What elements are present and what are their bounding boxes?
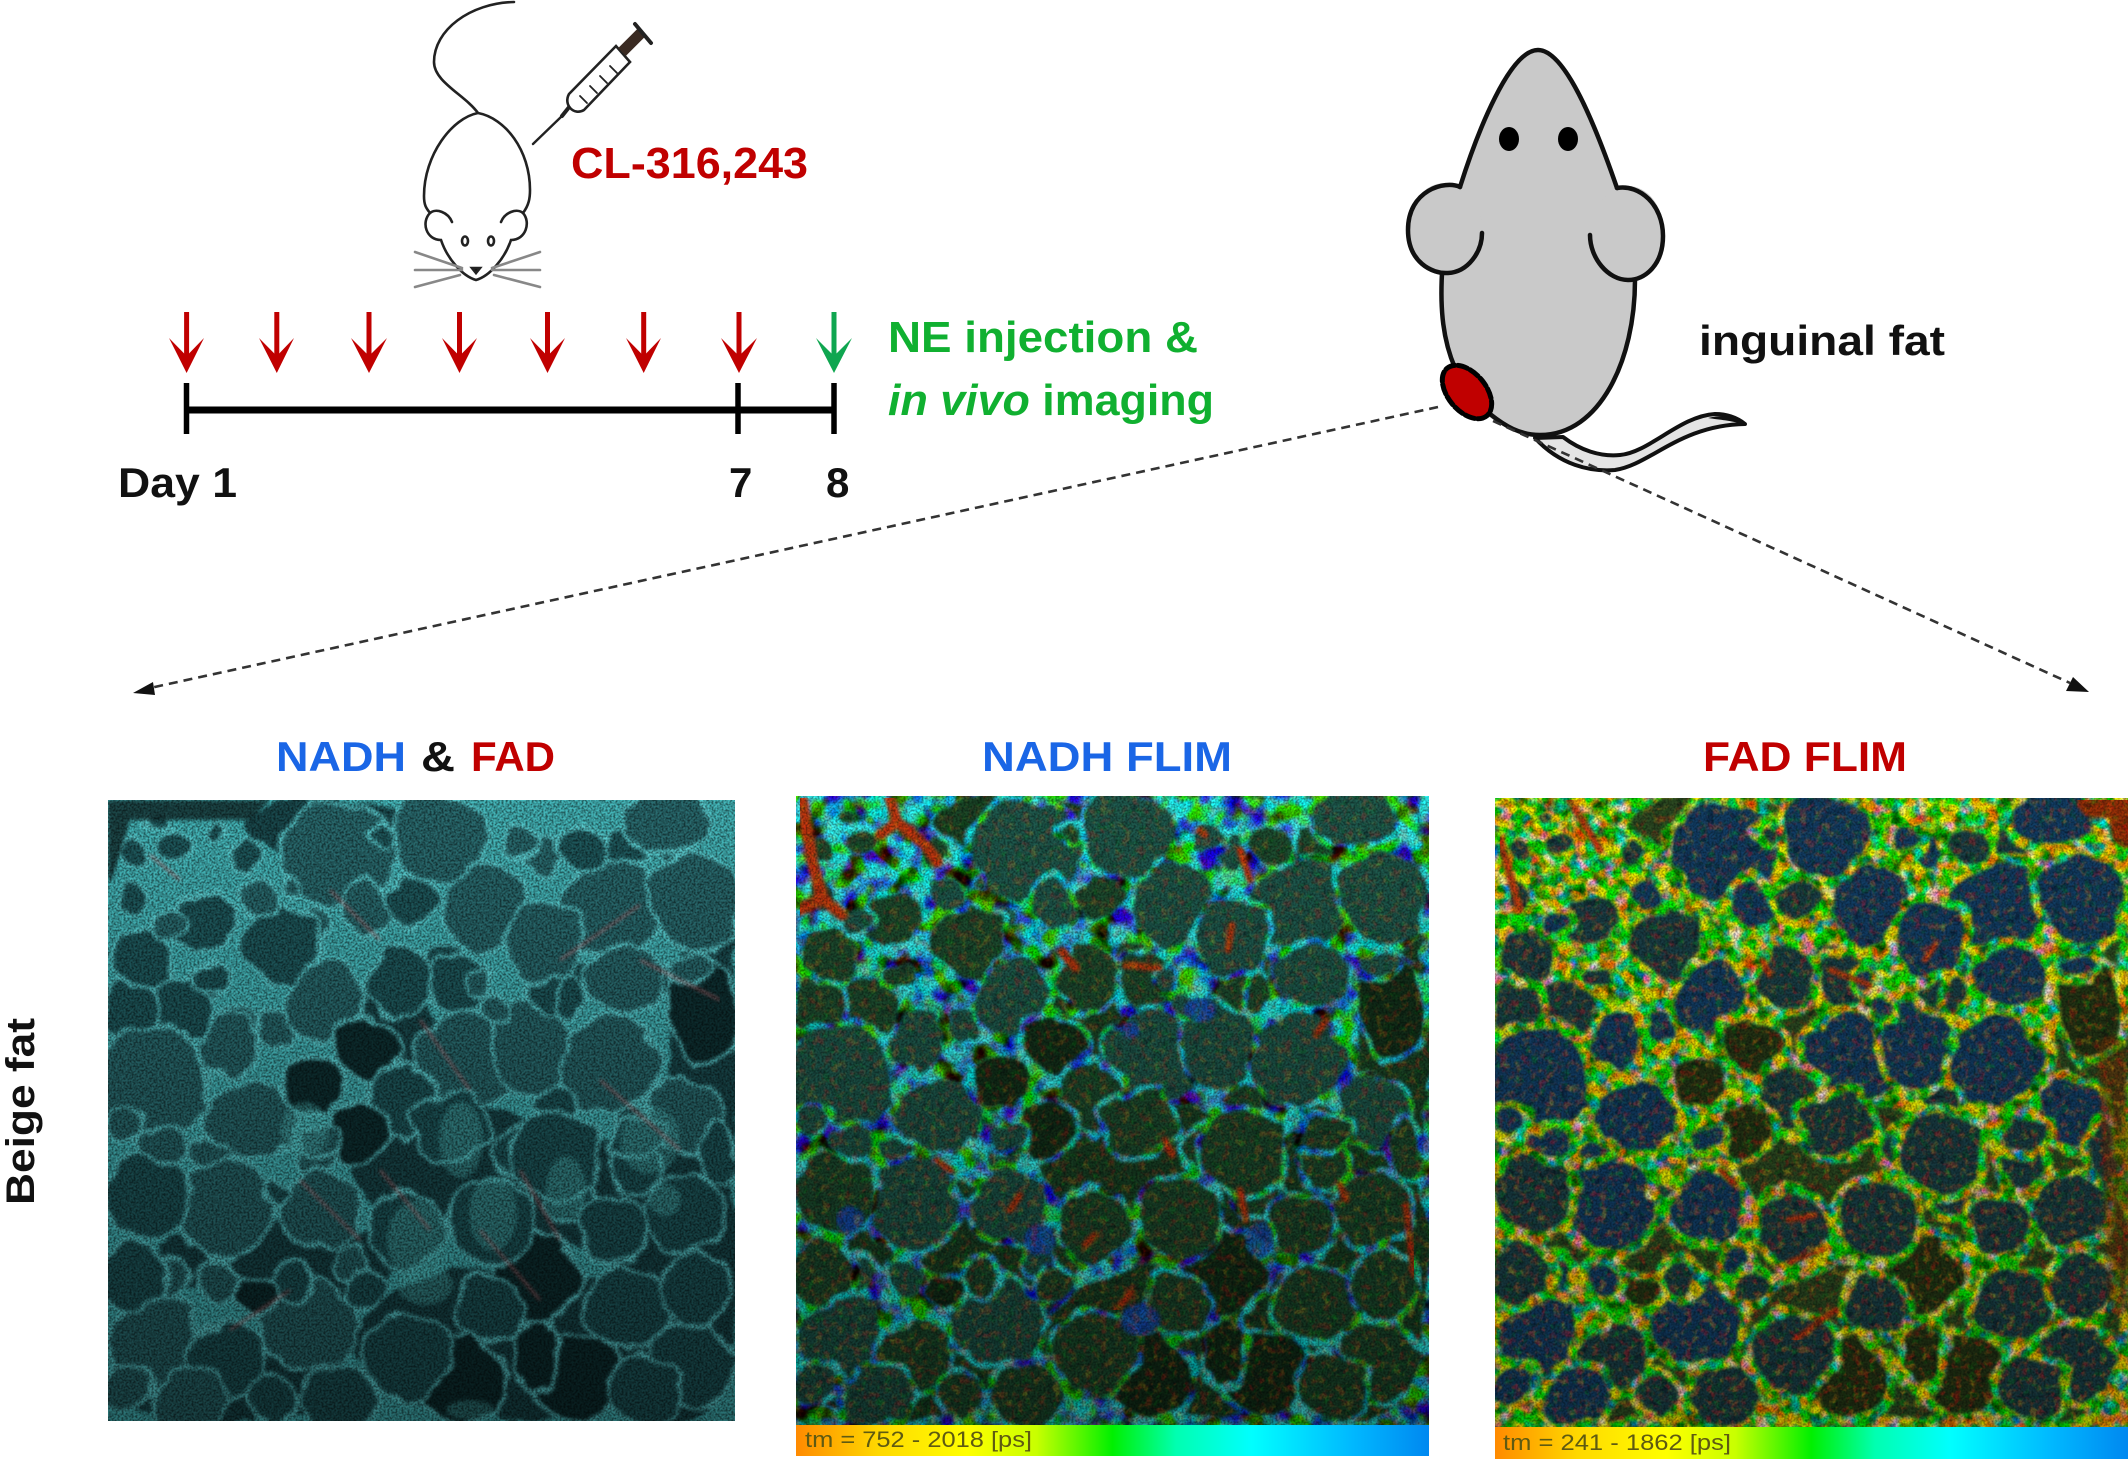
heading: NADH & FAD: & [421, 733, 455, 780]
arrow: dashed left zoom line [133, 407, 1438, 695]
heading: FAD FLIM: FAD FLIM [1703, 733, 1907, 780]
heading: NADH FLIM: NADH FLIM [982, 733, 1232, 780]
heading: NADH & FAD [276, 733, 555, 780]
text: inguinal fat: inguinal fat [1699, 317, 1945, 364]
color bar: NADH lifetime scale: tm = 752 - 2018 [ps] [805, 1427, 1032, 1452]
text: NE injection and in vivo imaging [888, 313, 1214, 425]
panel: NADH FLIM micrograph [782, 787, 1432, 1428]
timeline: injection schedule: 7 [729, 459, 752, 506]
row label: Beige fat: Beige fat [0, 1018, 43, 1205]
icon: line-art mouse with syringe [415, 2, 651, 287]
timeline: injection schedule [118, 312, 852, 506]
arrow: dashed right zoom line [1493, 421, 2089, 692]
text: NE injection and in vivo imaging: NE injection & [888, 313, 1198, 362]
text: NE injection and in vivo imaging: in vivo imaging [888, 376, 1214, 425]
panel: NADH and FAD micrograph [94, 791, 744, 1432]
heading: NADH & FAD: FAD [471, 733, 555, 780]
color bar: NADH lifetime scale [796, 1425, 1429, 1456]
color bar: FAD lifetime scale: tm = 241 - 1862 [ps] [1503, 1430, 1731, 1455]
heading: NADH & FAD: NADH [276, 733, 406, 780]
timeline: injection schedule: Day 1 [118, 459, 237, 506]
timeline: injection schedule: 8 [826, 459, 849, 506]
text: CL-316,243: CL-316,243 [571, 139, 808, 188]
panel: FAD FLIM micrograph [1480, 788, 2128, 1429]
color bar: FAD lifetime scale [1495, 1427, 2128, 1459]
icon: grey mouse with inguinal fat [1408, 50, 1746, 470]
